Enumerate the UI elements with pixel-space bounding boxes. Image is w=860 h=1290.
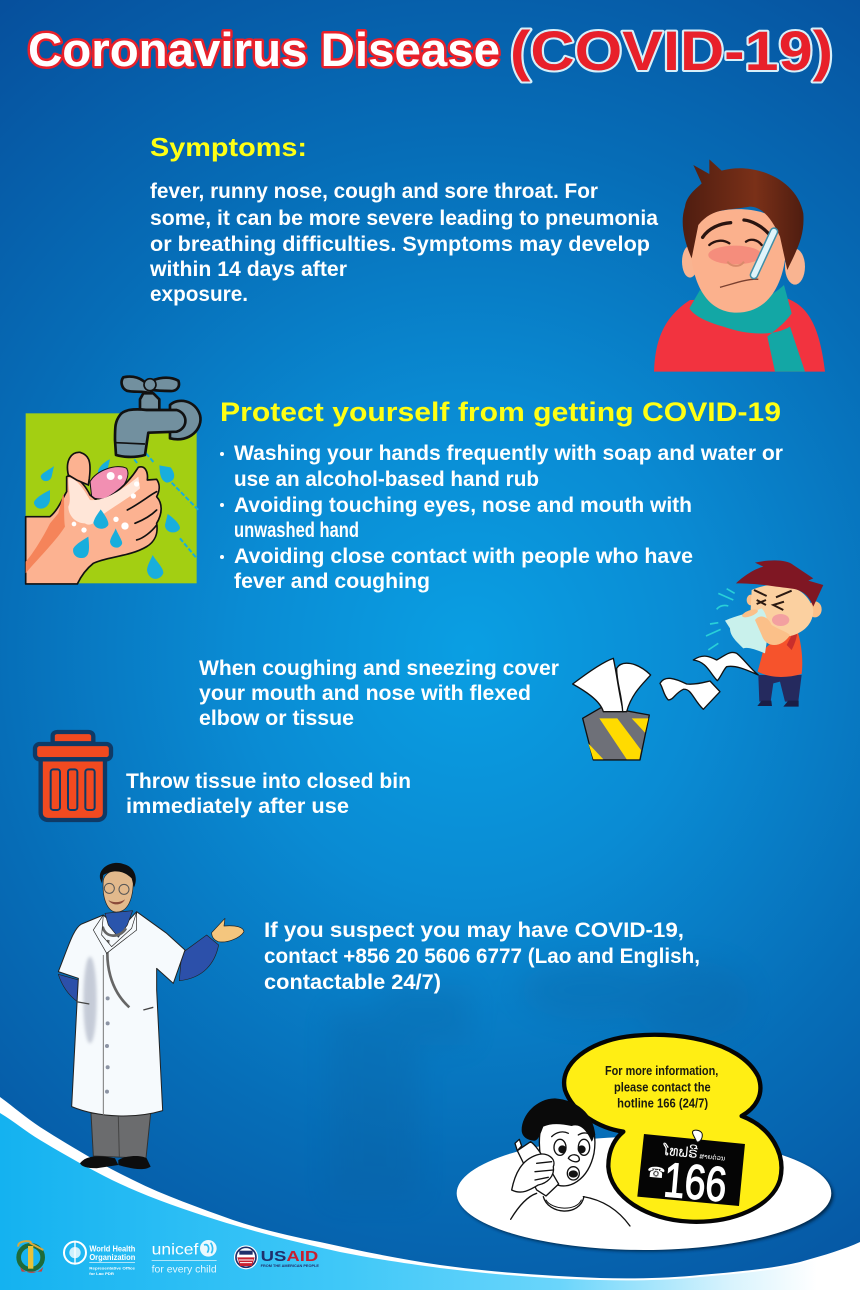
logo: World Health Organization: World Health bbox=[89, 1244, 135, 1254]
pockets bbox=[76, 1002, 153, 1010]
sneeze droplets bbox=[706, 589, 735, 650]
face bbox=[539, 1120, 595, 1186]
neck and shirt bbox=[105, 911, 133, 937]
icon: sick man with thermometer bbox=[654, 159, 825, 372]
bullet list: Avoiding touching eyes, nose and mouth with bbox=[234, 494, 692, 517]
hotline text: For more information, bbox=[605, 1064, 718, 1078]
lapels bbox=[93, 912, 137, 953]
trousers bbox=[91, 1113, 151, 1158]
text block: symptoms bbox=[149, 180, 658, 306]
sweater bbox=[654, 298, 825, 372]
logo: World Health Organization bbox=[64, 1241, 136, 1276]
hair bbox=[683, 159, 804, 270]
text block: throw tissue: Throw tissue into closed bin bbox=[126, 770, 411, 793]
text block: symptoms: or breathing difficulties. Symptoms may develop bbox=[150, 233, 650, 256]
white stripe bbox=[0, 1097, 860, 1290]
text block: suspect contact: If you suspect you may have COVID-19, bbox=[264, 919, 684, 942]
ears bbox=[682, 246, 698, 278]
boy legs bbox=[758, 675, 802, 702]
thermometer bbox=[754, 232, 774, 275]
soap bbox=[90, 467, 128, 499]
scarf bbox=[689, 285, 805, 372]
foam bbox=[68, 477, 140, 525]
logo: World Health Organization: for Lao PDR bbox=[89, 1271, 114, 1276]
bullet list: unwashed hand bbox=[234, 519, 359, 542]
text block: coughing and sneezing: your mouth and nose with flexed bbox=[199, 682, 531, 705]
boy brows and eyes bbox=[754, 590, 792, 610]
faint background photo bbox=[330, 960, 750, 1200]
body bbox=[41, 759, 105, 820]
boy hand bbox=[755, 616, 790, 645]
wrist shade bbox=[26, 493, 65, 573]
logos bbox=[18, 1240, 320, 1276]
face bbox=[690, 209, 787, 313]
coat shadow bbox=[83, 957, 97, 1043]
hotline text: hotline 166 (24/7) bbox=[617, 1097, 708, 1111]
mouth bbox=[108, 899, 125, 904]
hand bbox=[212, 918, 244, 942]
bullet list: Washing your hands frequently with soap and water or bbox=[234, 442, 783, 465]
text block: symptoms: exposure. bbox=[150, 283, 248, 306]
slots bbox=[51, 769, 95, 810]
raised thumb bbox=[67, 452, 90, 485]
drops on hand bbox=[73, 509, 122, 558]
phone bbox=[517, 1142, 559, 1196]
white coat bbox=[58, 912, 185, 1116]
text block: coughing and sneezing: elbow or tissue bbox=[199, 707, 354, 730]
stethoscope bbox=[103, 927, 129, 1007]
black sign bbox=[637, 1134, 745, 1206]
logo: USAID: FROM THE AMERICAN PEOPLE bbox=[261, 1264, 320, 1268]
yellow speech bubble bbox=[564, 1035, 781, 1222]
back sleeve bbox=[58, 974, 78, 1002]
text block: suspect contact: contactable 24/7) bbox=[264, 971, 441, 994]
text block: symptoms: some, it can be more severe leading to pneumonia bbox=[150, 207, 658, 230]
bottom swoosh bbox=[0, 1097, 860, 1290]
mouth bbox=[567, 1167, 579, 1180]
flying tissues bbox=[660, 678, 720, 709]
icon: doctor in white coat bbox=[58, 863, 244, 1169]
sign number 166: 166 bbox=[662, 1153, 729, 1212]
hair bbox=[522, 1098, 595, 1142]
title: Coronavirus Disease: Coronavirus Disease bbox=[28, 23, 500, 76]
brows bbox=[552, 1132, 592, 1137]
text block: symptoms: within 14 days after bbox=[149, 258, 347, 281]
water streams bbox=[134, 453, 198, 558]
green square bbox=[26, 413, 197, 583]
boy head bbox=[808, 601, 822, 617]
tissue box bbox=[583, 707, 649, 760]
tissue at nose bbox=[725, 608, 768, 653]
heading: Symptoms: Symptoms: bbox=[150, 132, 307, 162]
boy hair bbox=[736, 560, 823, 607]
sign lao text: ໂທຟຣີສາຍດ່ວນ bbox=[661, 1141, 726, 1164]
bullet list: fever and coughing bbox=[234, 570, 430, 593]
text block: symptoms: fever, runny nose, cough and sore throat. For bbox=[150, 180, 598, 203]
hotline text: please contact the bbox=[614, 1080, 711, 1094]
logo: unicef: unicef bbox=[152, 1241, 199, 1258]
hands bbox=[26, 467, 161, 584]
logo: Lao Ministry of Health bbox=[18, 1241, 43, 1273]
bullet list: use an alcohol-based hand rub bbox=[234, 468, 539, 491]
hand bbox=[512, 1154, 554, 1192]
buttons and placket bbox=[102, 955, 105, 1115]
title bbox=[28, 19, 833, 82]
text block: suspect contact bbox=[264, 919, 700, 994]
nose bbox=[568, 1155, 579, 1162]
closed eyes bbox=[709, 240, 762, 245]
glasses bbox=[104, 883, 129, 894]
bullet list bbox=[220, 442, 783, 593]
hotline callout bbox=[457, 1035, 833, 1251]
logo: USAID: USAID bbox=[261, 1249, 318, 1265]
boy on phone bbox=[511, 1120, 630, 1226]
icon: closed bin bbox=[35, 732, 111, 820]
water drops bbox=[34, 459, 180, 579]
hotline text bbox=[605, 1064, 718, 1111]
brows bbox=[703, 220, 768, 237]
finger lines bbox=[127, 492, 157, 540]
white ellipse bbox=[459, 1139, 833, 1251]
logo: World Health Organization: Representative Office bbox=[89, 1265, 136, 1270]
tissues bbox=[573, 658, 623, 712]
logo: unicef bbox=[152, 1240, 217, 1276]
logo: World Health Organization: Organization bbox=[89, 1252, 135, 1262]
light blue band bbox=[0, 1113, 860, 1290]
text block: coughing and sneezing: When coughing and sneezing cover bbox=[199, 657, 559, 680]
icon: washing hands under tap bbox=[26, 377, 200, 584]
logo: USAID bbox=[234, 1245, 320, 1269]
front sleeve bbox=[179, 935, 219, 981]
eyes bbox=[554, 1139, 566, 1155]
mouth bbox=[720, 279, 758, 287]
logo: unicef: for every child bbox=[152, 1265, 217, 1276]
icon: tissue box and sneezing boy bbox=[573, 560, 823, 760]
sign pin bbox=[693, 1130, 702, 1142]
lid bbox=[35, 744, 111, 759]
head bbox=[103, 870, 133, 912]
title: (COVID-19): (COVID-19) bbox=[510, 19, 833, 82]
shoulders bbox=[511, 1193, 630, 1226]
text block: protective measures bbox=[220, 442, 783, 593]
shoes bbox=[80, 1156, 118, 1168]
blush and nose bbox=[708, 246, 762, 264]
heading: protect yourself: Protect yourself from getting COVID-19 bbox=[220, 397, 781, 427]
text block: suspect contact: contact +856 20 5606 6777 (Lao and English, bbox=[264, 945, 700, 968]
sign phone icon: ☎ bbox=[646, 1164, 666, 1182]
faucet bbox=[115, 377, 200, 457]
boy shirt bbox=[758, 628, 802, 677]
lid handle bbox=[53, 732, 93, 743]
bullet list: Avoiding close contact with people who have bbox=[234, 545, 693, 568]
text block: coughing and sneezing bbox=[199, 657, 559, 730]
text block: throw tissue: immediately after use bbox=[126, 795, 349, 818]
text block: throw tissue bbox=[126, 770, 411, 818]
